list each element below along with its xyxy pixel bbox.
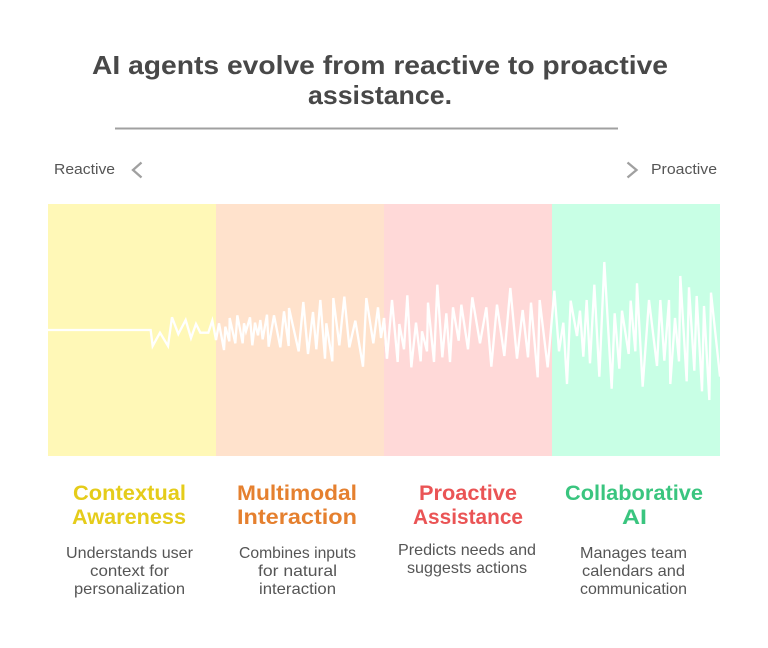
panel: proactive assistance band [384, 204, 552, 456]
heading: contextual awareness: Contextual [73, 482, 186, 505]
description: proactive assistance [398, 542, 536, 577]
column: multimodal interaction [237, 482, 357, 598]
heading: contextual awareness [72, 482, 186, 529]
description: proactive assistance: Predicts needs and [398, 542, 536, 559]
description: proactive assistance: suggests actions [407, 560, 527, 577]
proactive axis label [628, 161, 717, 178]
description: collaborative AI: calendars and [582, 563, 685, 580]
description: collaborative AI: Manages team [580, 545, 687, 562]
heading: multimodal interaction: Interaction [237, 506, 357, 529]
description: contextual awareness: Understands user [66, 545, 194, 562]
description: multimodal interaction: Combines inputs [239, 545, 356, 562]
panel: contextual awareness band [48, 204, 216, 456]
panel: multimodal interaction band [216, 204, 384, 456]
heading: proactive assistance: Proactive [419, 482, 517, 505]
icon: right chevron [628, 162, 636, 178]
title [92, 50, 668, 110]
heading: contextual awareness: Awareness [72, 506, 186, 529]
title: AI agents evolve from reactive to proactive [92, 50, 668, 80]
icon: left chevron [133, 162, 142, 178]
description: contextual awareness: personalization [74, 581, 185, 598]
waveform line [48, 262, 720, 400]
heading: collaborative AI [565, 482, 703, 529]
description: collaborative AI: communication [580, 581, 687, 598]
description: multimodal interaction: interaction [259, 581, 336, 598]
heading: multimodal interaction: Multimodal [237, 482, 357, 505]
heading: collaborative AI: AI [622, 506, 647, 529]
description: multimodal interaction: for natural [258, 563, 337, 580]
panel: collaborative AI band [552, 204, 720, 456]
heading: proactive assistance [413, 482, 523, 529]
heading: proactive assistance: Assistance [413, 506, 523, 529]
description: contextual awareness: context for [90, 563, 170, 580]
column: collaborative AI [565, 482, 703, 598]
description: multimodal interaction [239, 545, 356, 598]
heading: collaborative AI: Collaborative [565, 482, 703, 505]
heading: multimodal interaction [237, 482, 357, 529]
reactive axis label [54, 161, 142, 178]
description: collaborative AI [580, 545, 687, 598]
column: contextual awareness [66, 482, 194, 598]
waveform chart panel [48, 204, 720, 456]
reactive axis label: Reactive [54, 161, 115, 178]
description: contextual awareness [66, 545, 194, 598]
column: proactive assistance [398, 482, 536, 577]
title: assistance. [308, 80, 452, 110]
proactive axis label: Proactive [651, 161, 717, 178]
